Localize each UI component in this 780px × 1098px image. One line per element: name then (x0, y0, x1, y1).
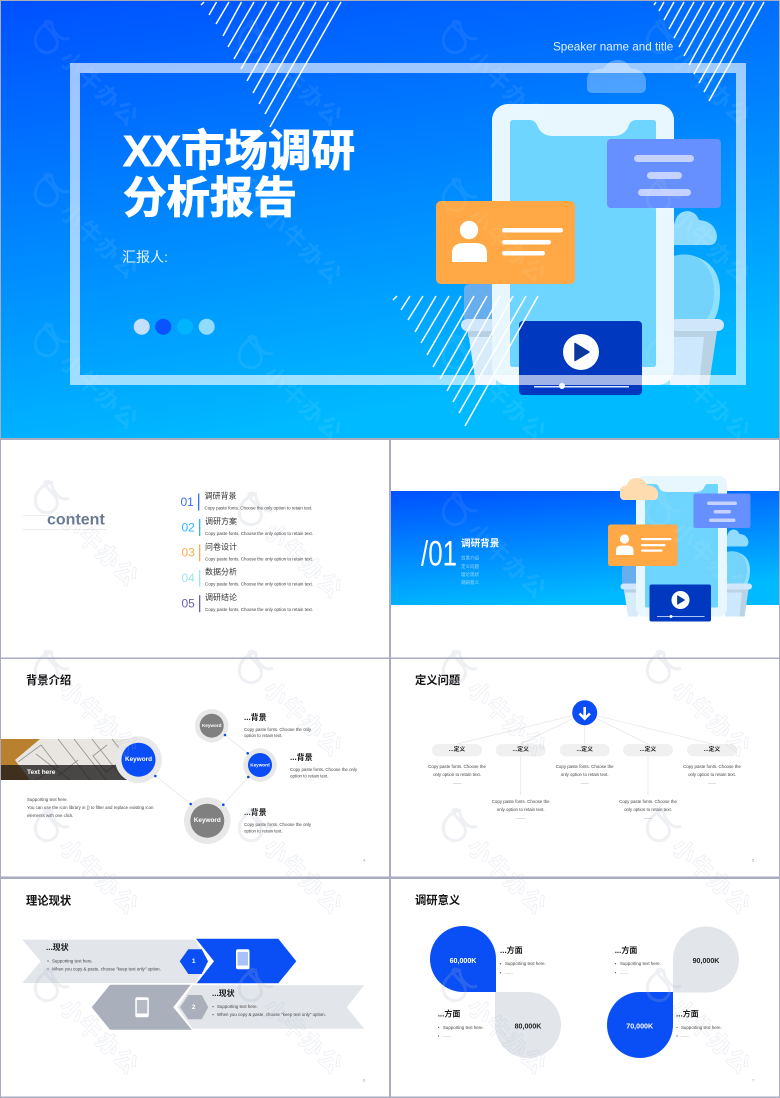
list item 04: 04 (182, 571, 195, 585)
card: purple message (607, 139, 721, 208)
decoration: top-right stripes (654, 2, 764, 101)
text: section list (461, 554, 479, 586)
list item 05: Copy paste fonts. Choose the only option to retain text. (205, 607, 313, 612)
text: aspect one: Supporting text here. (505, 961, 546, 966)
arrow: gray hexagon with phone (92, 985, 192, 1030)
list item 01: 01 (180, 495, 194, 509)
badge: number 1 (180, 949, 208, 974)
column one: Copy paste fonts. Choose the (428, 764, 486, 769)
arrow: gray banner one (22, 940, 208, 983)
icon: phone (492, 104, 674, 385)
column three: only option to retain text. (561, 772, 609, 777)
card: video player (650, 584, 711, 622)
node: large gray keyword (184, 797, 231, 844)
text: background block one: option to retain text. (244, 733, 283, 738)
text: background block one: Copy paste fonts. Choose the only (244, 727, 312, 732)
arrow: blue hexagon with phone (196, 939, 296, 983)
watermark: tiled logo: 小牛办公 (55, 834, 144, 919)
column five (683, 744, 741, 784)
icon: peach cloud (620, 478, 658, 500)
column five: only option to retain text. (688, 772, 736, 777)
watermark: tiled logo: 小牛办公 (463, 361, 552, 446)
heading: cover title (123, 128, 355, 223)
watermark: tiled logo: 小牛办公 (463, 46, 552, 131)
list item 04: Copy paste fonts. Choose the only option to retain text. (205, 582, 313, 587)
connector lines (155, 735, 248, 805)
text: status two: ...现状 (212, 988, 235, 998)
watermark: tiled logo: 小牛办公 (667, 834, 756, 919)
node: small gray keyword (195, 709, 228, 742)
text: supporting paragraph (27, 797, 154, 818)
card: orange profile (608, 524, 678, 566)
petal: 90,000K: 90,000K (693, 957, 720, 965)
list item 02: 02 (182, 520, 195, 534)
text: section list: 调研意义 (461, 579, 479, 586)
column two (492, 744, 550, 818)
page number: 5 (752, 858, 755, 862)
text: status one: ...现状 (46, 942, 69, 952)
text: background block one (244, 712, 312, 738)
text: photo caption: Text here (27, 769, 56, 776)
column three (556, 744, 614, 784)
node: large blue keyword: Keyword (125, 756, 152, 763)
illustration: phone with cards and plants (436, 60, 724, 395)
text: background block two (290, 752, 358, 778)
text: status one: Supporting text here. (52, 958, 93, 964)
heading: theory status: 理论现状 (26, 893, 72, 907)
text: background block two: Copy paste fonts. Choose the only (290, 767, 358, 772)
panel: define problem slide (391, 659, 779, 876)
page number: 4 (363, 858, 366, 862)
card: orange profile (436, 201, 575, 284)
panel: significance slide (391, 879, 779, 1096)
decoration: bottom stripes (393, 296, 538, 426)
watermark: tiled logo: 小牛办公 (259, 676, 348, 761)
heading: significance: 调研意义 (415, 893, 461, 907)
frame (70, 63, 746, 385)
text: background block three: option to retain text. (244, 828, 283, 834)
watermark: tiled logo: 小牛办公 (463, 834, 552, 919)
text: background block two: option to retain text. (290, 774, 329, 778)
icon: down arrow (572, 700, 597, 725)
icon: left pot (620, 584, 638, 616)
petal: 80,000K: 80,000K (515, 1023, 542, 1031)
list item 03: Copy paste fonts. Choose the only option to retain text. (205, 556, 313, 561)
badge: number 1: 1 (192, 958, 196, 965)
heading: background: 背景介绍 (26, 673, 71, 687)
petal: 80,000K (495, 992, 561, 1058)
page number: 6 (363, 1078, 366, 1082)
watermark: tiled logo: 小牛办公 (259, 834, 348, 919)
text: aspect four: ...方面 (676, 1008, 699, 1018)
watermark: tiled logo: 小牛办公 (55, 676, 144, 761)
panel: contents slide (1, 440, 389, 658)
icon: phone (636, 476, 727, 616)
petal: 70,000K (607, 992, 673, 1058)
text: aspect three (615, 945, 661, 973)
column one: ...定义 (449, 745, 465, 753)
list item 02: Copy paste fonts. Choose the only option to retain text. (205, 531, 313, 536)
watermark: tiled logo: 小牛办公 (463, 204, 552, 289)
text: aspect four: Supporting text here. (681, 1025, 722, 1030)
icon: right cloud (674, 211, 717, 245)
watermark: tiled logo: 小牛办公 (259, 204, 348, 289)
column two: ...定义 (512, 745, 529, 753)
text: status two: When you copy & paste, choose "keep text only" option. (217, 1012, 326, 1017)
list item 01: 调研背景 (204, 490, 236, 500)
icon: right cactus (727, 551, 750, 584)
text: section list: 理论现状 (461, 571, 479, 578)
column one: only option to retain text. (433, 772, 481, 777)
watermark: tiled logo: 小牛办公 (55, 506, 144, 591)
column two: only option to retain text. (497, 807, 545, 812)
text: status one: When you copy & paste, choose "keep text only" option. (52, 966, 161, 972)
watermark: tiled logo: 小牛办公 (667, 361, 756, 446)
text: supporting paragraph: Supporting text here. (27, 797, 68, 802)
list item 01 (180, 490, 312, 510)
text: status one (46, 942, 161, 972)
list item 03 (182, 541, 313, 561)
icon: left cactus (622, 566, 637, 584)
photo: keyboard (1, 739, 131, 780)
heading: cover title: XX市场调研 (123, 128, 355, 176)
list item 04: 数据分析 (205, 567, 237, 577)
text: background block three: Copy paste fonts. Choose the only (244, 822, 312, 827)
petal: 70,000K: 70,000K (626, 1023, 654, 1031)
icon: top cloud (587, 60, 646, 93)
watermark: tiled logo: 小牛办公 (463, 994, 552, 1079)
arrow: gray banner two (177, 985, 364, 1029)
text: aspect two: ...方面 (438, 1008, 460, 1018)
heading: content: content (47, 512, 105, 528)
column five: ...定义 (704, 745, 720, 753)
badge: number 2 (180, 995, 208, 1019)
node: small gray keyword: Keyword (202, 723, 222, 728)
text: aspect two: Supporting text here. (443, 1025, 484, 1030)
watermark: tiled logo: 小牛办公 (259, 518, 348, 603)
watermark: tiled logo: 小牛办公 (463, 518, 552, 603)
column four (619, 744, 677, 818)
text: supporting paragraph: elements with one click. (27, 813, 73, 818)
list item 05 (182, 592, 313, 612)
node: small blue keyword (243, 748, 277, 782)
column one (428, 744, 486, 784)
text: supporting paragraph: You can use the icon library in () to filter and replace existing icon (27, 805, 154, 810)
icon: right pot (725, 584, 752, 616)
list item 02: 调研方案 (205, 516, 237, 526)
badge: number 2: 2 (192, 1004, 196, 1011)
text: aspect three: ...方面 (615, 945, 637, 955)
text: speaker: Speaker name and title (553, 40, 673, 54)
text: aspect four (676, 1008, 722, 1037)
watermark: tiled logo: 小牛办公 (259, 46, 348, 131)
list item 02 (182, 516, 313, 536)
icon: right pot (670, 319, 724, 385)
text: aspect one (500, 945, 546, 973)
card: purple message (694, 494, 750, 528)
text: aspect one: ...方面 (500, 945, 523, 955)
list item 05: 调研结论 (205, 592, 237, 602)
text: background block three (244, 807, 312, 834)
watermark: tiled logo: 小牛办公 (259, 994, 348, 1079)
text: status two: Supporting text here. (217, 1004, 258, 1009)
watermark: tiled logo: 小牛办公 (259, 361, 348, 446)
node: small blue keyword: Keyword (250, 762, 270, 768)
text: reporter: 汇报人: (122, 249, 168, 265)
icon: left cactus (464, 284, 494, 319)
column four: Copy paste fonts. Choose the (619, 799, 677, 804)
watermark: tiled logo: 小牛办公 (55, 199, 144, 284)
list item 05: 05 (182, 596, 195, 610)
petal: 90,000K (673, 926, 739, 992)
icon: left pot (461, 319, 497, 385)
text: section list: 背景介绍 (461, 554, 479, 562)
watermark: tiled logo: 小牛办公 (55, 349, 144, 434)
text: section list: 定义问题 (461, 563, 479, 570)
watermark: tiled logo: 小牛办公 (667, 676, 756, 761)
page number: 7 (752, 1078, 755, 1082)
text: aspect two (438, 1008, 484, 1037)
text: background block two: ...背景 (290, 752, 313, 762)
text: background block one: ...背景 (244, 712, 267, 722)
petal: 60,000K (430, 926, 496, 992)
connector lines (457, 713, 712, 795)
panel: theory status slide (1, 879, 389, 1096)
node: large blue keyword (115, 736, 162, 783)
watermark: tiled logo: 小牛办公 (55, 994, 144, 1079)
decoration: four dots (134, 319, 215, 335)
watermark: tiled logo: 小牛办公 (463, 676, 552, 761)
list item 03: 03 (182, 546, 195, 560)
list item 03: 问卷设计 (205, 541, 237, 551)
heading: define problem: 定义问题 (415, 673, 460, 687)
list item 01: Copy paste fonts. Choose the only option to retain text. (204, 506, 312, 510)
watermark: tiled logo: 小牛办公 (55, 46, 144, 131)
heading: cover title: 分析报告 (123, 175, 297, 223)
watermark: tiled logo: 小牛办公 (667, 204, 756, 289)
petal: 60,000K: 60,000K (450, 957, 477, 965)
text: aspect three: Supporting text here. (620, 961, 661, 966)
connector dots (154, 734, 250, 806)
heading: content (23, 512, 106, 530)
decoration: top-left stripes (201, 2, 341, 127)
node: large gray keyword: Keyword (194, 817, 221, 824)
text: background block three: ...背景 (244, 807, 267, 817)
watermark: tiled logo: 小牛办公 (667, 518, 756, 603)
icon: right cloud (727, 530, 748, 546)
column five: Copy paste fonts. Choose the (683, 764, 741, 769)
text: section number: /01 (421, 534, 457, 574)
illustration: small phone with cards (608, 476, 752, 622)
column four: ...定义 (640, 745, 656, 753)
card: video player (519, 321, 642, 395)
watermark: tiled logo: 小牛办公 (667, 46, 756, 131)
column four: only option to retain text. (624, 807, 672, 812)
panel: cover slide (1, 1, 779, 438)
banner (391, 491, 779, 605)
column two: Copy paste fonts. Choose the (492, 799, 550, 804)
heading: section title: 调研背景 (461, 538, 500, 550)
list item 04 (182, 567, 313, 587)
panel: background slide (1, 659, 389, 876)
text: status two (212, 988, 326, 1017)
panel: section slide (391, 440, 779, 658)
icon: right cactus (674, 254, 720, 320)
column three: Copy paste fonts. Choose the (556, 764, 614, 769)
column three: ...定义 (576, 745, 593, 753)
watermark: tiled logo: 小牛办公 (667, 994, 756, 1079)
